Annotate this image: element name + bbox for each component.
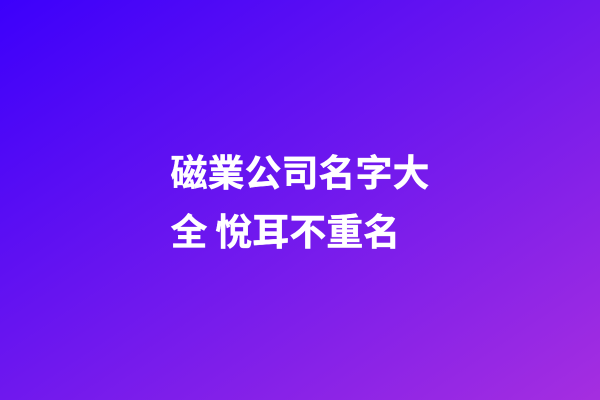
title: 磁業公司名字大 (170, 153, 430, 194)
title (170, 153, 430, 253)
title: 全 悅耳不重名 (170, 212, 400, 253)
